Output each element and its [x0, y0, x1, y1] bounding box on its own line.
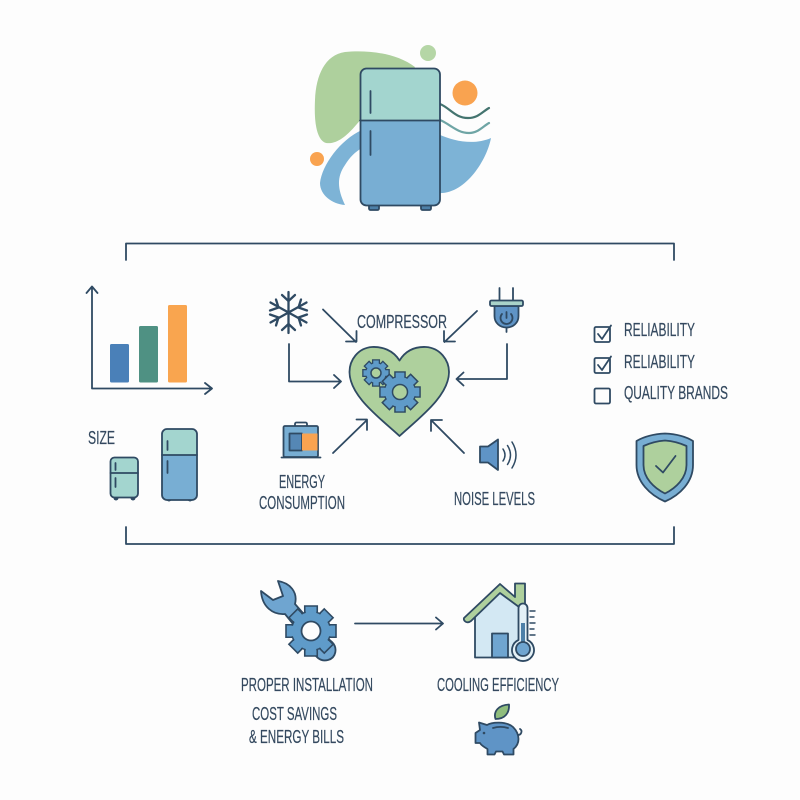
heart	[350, 347, 449, 436]
arrow: installation to efficiency	[355, 618, 443, 630]
wrench	[261, 581, 335, 660]
item: reliability 2: RELIABILITY	[624, 352, 695, 372]
energy consumption label: ENERGY	[279, 472, 325, 492]
cooling efficiency label: COOLING EFFICIENCY	[437, 675, 559, 695]
door	[492, 634, 508, 658]
arrow: noise diagonal	[431, 420, 464, 453]
proper installation label: PROPER INSTALLATION	[241, 675, 373, 695]
checklist	[594, 320, 728, 404]
piggy bank icon	[476, 704, 521, 754]
air waves	[440, 104, 489, 133]
small fridge	[110, 458, 138, 500]
orange dot	[310, 152, 324, 166]
item: reliability 1: RELIABILITY	[624, 320, 695, 340]
speaker icon	[480, 440, 516, 470]
arrow: snowflake diagonal	[323, 310, 356, 342]
energy consumption label	[259, 472, 345, 513]
snowflake icon	[270, 292, 307, 333]
house body	[475, 590, 521, 658]
large gear	[380, 372, 420, 412]
green blob	[315, 51, 415, 143]
energy consumption label: CONSUMPTION	[259, 493, 345, 513]
cost savings label: & ENERGY BILLS	[249, 727, 344, 747]
gear	[286, 606, 336, 656]
top bracket	[126, 244, 674, 260]
arrow: plug elbow	[456, 344, 507, 386]
small gear	[363, 360, 389, 386]
bar chart	[86, 286, 212, 394]
roof	[464, 584, 525, 622]
wrench and gear icon	[261, 581, 336, 660]
energy meter icon	[282, 422, 320, 458]
size label: SIZE	[88, 428, 115, 448]
plug icon	[490, 288, 523, 332]
leaf	[495, 704, 509, 719]
house with thermometer icon	[464, 584, 535, 661]
cost savings label: COST SAVINGS	[252, 704, 337, 724]
cost savings label	[249, 704, 344, 747]
large fridge	[162, 429, 197, 502]
arrow: snowflake elbow	[289, 344, 341, 388]
heart with gears	[350, 347, 449, 436]
noise levels label: NOISE LEVELS	[454, 489, 535, 509]
arrow: energy diagonal	[333, 420, 367, 453]
orange sun	[452, 80, 478, 106]
item: quality brands: QUALITY BRANDS	[624, 383, 728, 403]
shield icon	[636, 434, 693, 502]
compressor label: COMPRESSOR	[357, 312, 447, 332]
fridge	[360, 68, 440, 210]
thermometer	[512, 604, 535, 661]
arrow: plug diagonal	[444, 311, 477, 342]
bottom bracket	[126, 527, 674, 544]
green dot	[420, 45, 436, 61]
hero: refrigerator illustration	[310, 45, 491, 210]
pig	[476, 722, 518, 754]
arrows into heart	[289, 310, 507, 453]
blue swoosh	[320, 130, 491, 205]
